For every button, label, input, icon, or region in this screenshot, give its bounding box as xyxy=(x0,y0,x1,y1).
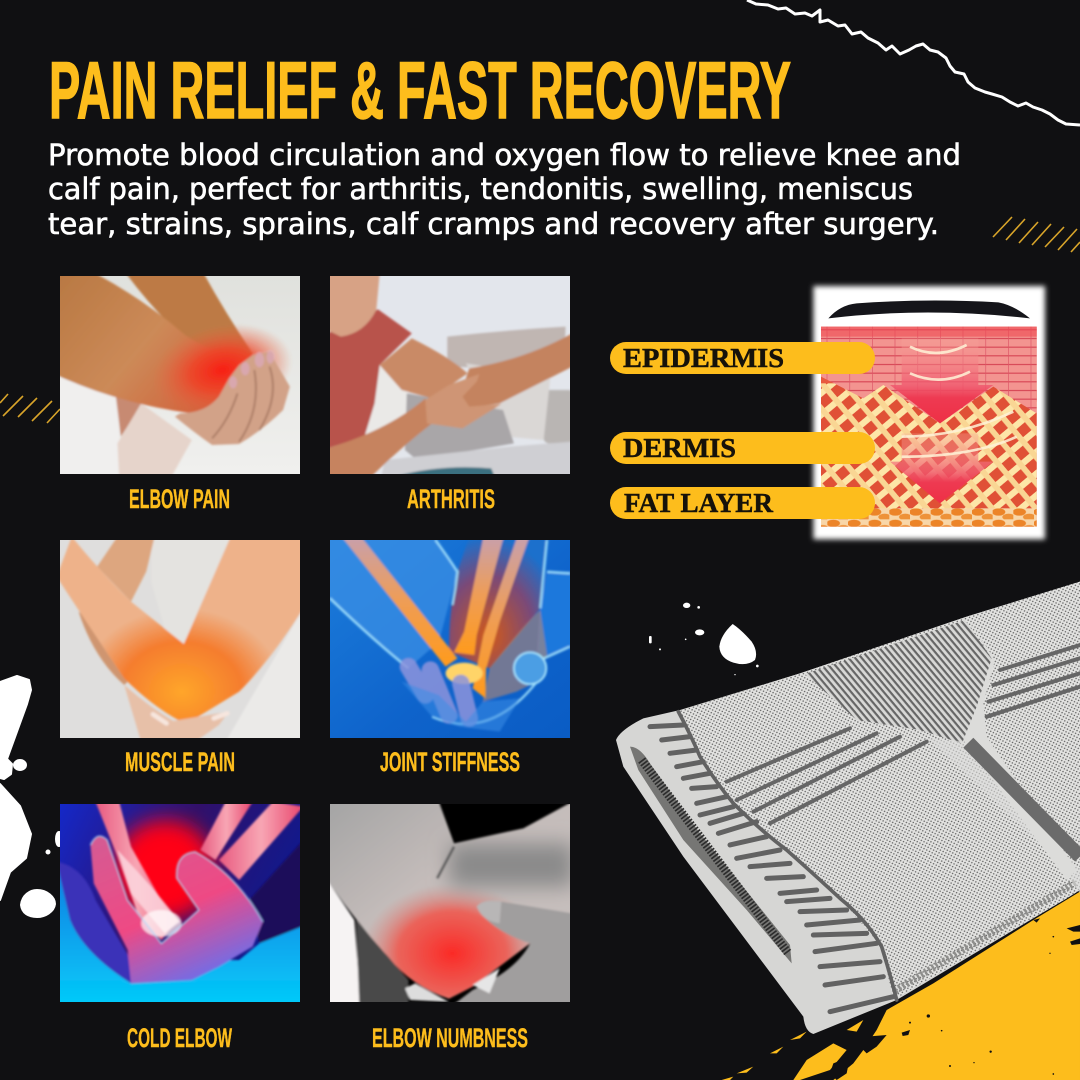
subtitle text block xyxy=(48,138,961,241)
skin cross-section xyxy=(821,327,1037,527)
subtitle text block: tear, strains, sprains, calf cramps and recovery after surgery. xyxy=(48,207,939,241)
subtitle text block: Promote blood circulation and oxygen flow to relieve knee and xyxy=(48,138,961,172)
label pill: epidermis xyxy=(610,342,875,374)
photo: elbow numbness xyxy=(330,804,570,1002)
bottom selvedge xyxy=(895,882,1077,991)
hatch accent, left xyxy=(0,394,60,423)
photo: elbow pain xyxy=(60,276,300,474)
black arc xyxy=(828,301,1030,318)
skin layers diagram xyxy=(813,286,1045,539)
label: joint stiffness: JOINT STIFFNESS xyxy=(380,747,520,777)
photo: muscle pain xyxy=(60,540,300,738)
yellow paint swash xyxy=(722,892,1080,1080)
label pill: fat layer: FAT LAYER xyxy=(624,488,773,518)
white paint drop with specks xyxy=(649,603,759,675)
hatch accent, top right xyxy=(993,217,1080,252)
grey seam band xyxy=(968,743,1080,857)
subtitle text block: calf pain, perfect for arthritis, tendonitis, swelling, meniscus xyxy=(48,172,913,206)
label: cold elbow: COLD ELBOW xyxy=(127,1023,232,1053)
label: arthritis: ARTHRITIS xyxy=(407,484,495,514)
illustration: joint stiffness xyxy=(330,540,570,738)
dark inner lining xyxy=(630,747,792,963)
illustration: cold elbow xyxy=(60,804,300,1002)
label pill: epidermis: EPIDERMIS xyxy=(623,343,784,373)
label: elbow numbness: ELBOW NUMBNESS xyxy=(372,1023,528,1053)
long stripes xyxy=(727,645,1080,823)
label pill: fat layer xyxy=(610,487,875,519)
white paint splatter, left xyxy=(0,676,62,917)
label pill: dermis: DERMIS xyxy=(623,433,736,463)
cuff stripes and seam xyxy=(650,712,897,1012)
torn paper edge, top right xyxy=(747,0,1080,125)
label: muscle pain: MUSCLE PAIN xyxy=(125,747,235,777)
glowing white frame xyxy=(813,286,1045,539)
compression sleeve xyxy=(616,582,1080,1034)
label: elbow pain: ELBOW PAIN xyxy=(129,484,230,514)
label pill: dermis xyxy=(610,432,875,464)
photo: arthritis xyxy=(330,276,570,474)
ribbed panel xyxy=(805,620,992,743)
